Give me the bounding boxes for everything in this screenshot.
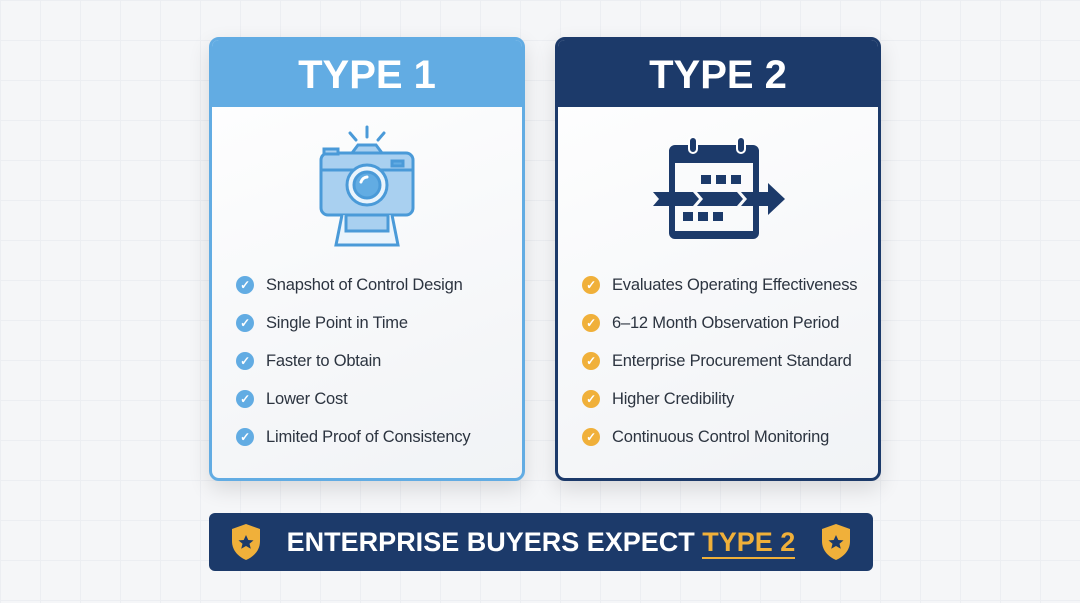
checklist: type 1: Limited Proof of Consistency [266, 428, 470, 446]
heading: type 1: TYPE 1 [298, 53, 436, 97]
checklist: type 1: Snapshot of Control Design [266, 276, 463, 294]
checklist: type 1: Lower Cost [266, 390, 347, 408]
checklist: type 2: Evaluates Operating Effectiveness [612, 276, 857, 294]
checklist: type 1: ✓ [240, 278, 250, 292]
banner: enterprise buyers expect type 2: ENTERPRISE BUYERS EXPECT TYPE 2 [287, 527, 795, 557]
checklist: type 2 [582, 276, 857, 446]
checklist: type 1 [236, 276, 471, 446]
heading: type 1 [212, 40, 522, 107]
checklist: type 2: ✓ [586, 278, 596, 292]
checklist: type 2: 6–12 Month Observation Period [612, 314, 839, 332]
checklist: type 1: ✓ [240, 316, 250, 330]
checklist: type 1: Faster to Obtain [266, 352, 381, 370]
checklist: type 1: Single Point in Time [266, 314, 408, 332]
heading: type 2: TYPE 2 [649, 53, 787, 97]
banner: enterprise buyers expect type 2 [209, 513, 873, 571]
checklist: type 2: Continuous Control Monitoring [612, 428, 829, 446]
checklist: type 2: ✓ [586, 354, 596, 368]
checklist: type 2: Enterprise Procurement Standard [612, 352, 852, 370]
checklist: type 2: Higher Credibility [612, 390, 734, 408]
panel: type 2 [555, 37, 881, 481]
icon: calendar arrow [653, 138, 785, 239]
checklist: type 2: ✓ [586, 316, 596, 330]
icon: shield left [232, 524, 260, 560]
panel: type 1 [209, 37, 525, 481]
checklist: type 1: ✓ [240, 354, 250, 368]
checklist: type 2: ✓ [586, 392, 596, 406]
checklist: type 1: ✓ [240, 430, 250, 444]
icon: shield right [822, 524, 850, 560]
checklist: type 1: ✓ [240, 392, 250, 406]
checklist: type 2: ✓ [586, 430, 596, 444]
icon: camera [320, 126, 414, 246]
heading: type 2 [558, 40, 878, 107]
